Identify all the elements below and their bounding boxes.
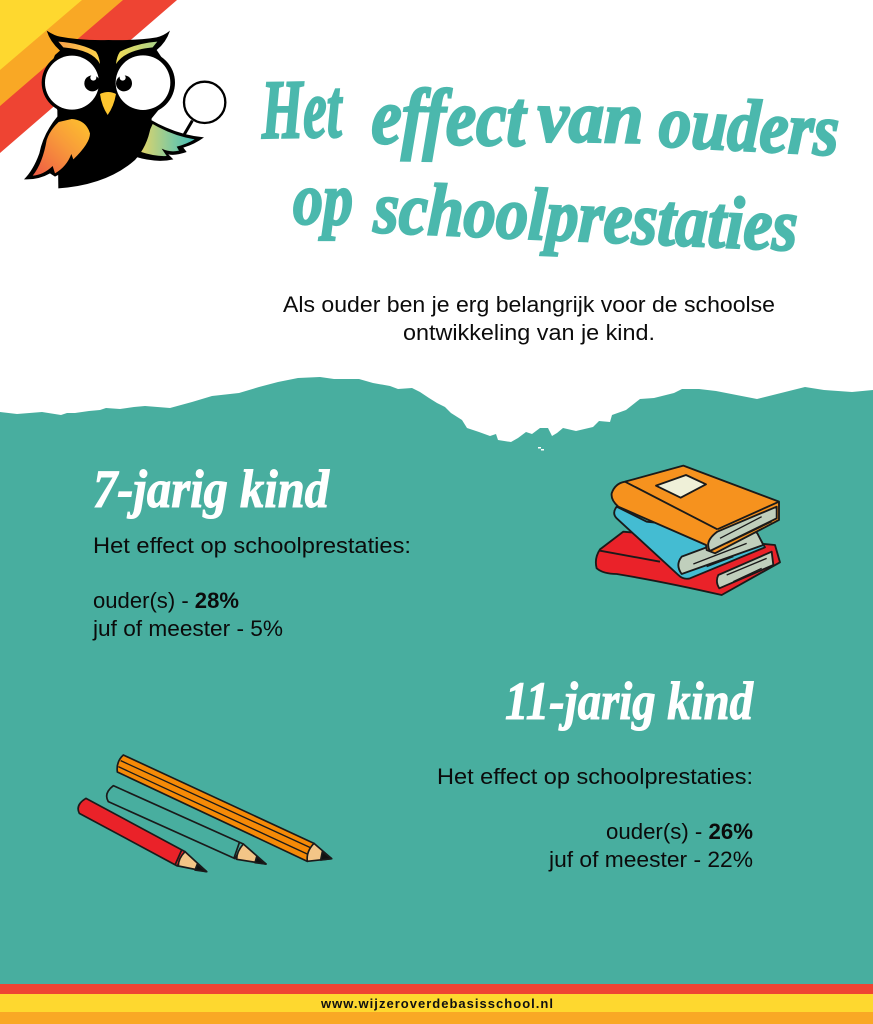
text block: 11-jarig effect — [437, 764, 753, 872]
heading: 11-jarig kind: 11-jarig kind — [505, 671, 754, 731]
intro text: ontwikkeling van je kind. — [403, 320, 655, 345]
book label — [656, 475, 706, 498]
panel: teal background with torn edge — [0, 377, 873, 984]
title: op — [293, 159, 353, 241]
icon: stack of books — [596, 466, 780, 595]
icon: owl mascot with magnifying glass — [24, 31, 225, 188]
blue book — [614, 507, 765, 579]
corner stripes — [0, 0, 177, 153]
owl eyebrows — [58, 42, 157, 64]
teal pencil — [107, 786, 266, 864]
orange pencil — [117, 755, 332, 861]
orange book — [612, 466, 779, 553]
red pencil — [78, 798, 207, 872]
heading: 7-jarig kind: 7-jarig kind — [93, 459, 330, 519]
text block: 11-jarig effect: Het effect op schoolprestaties: — [437, 764, 753, 789]
owl eyes — [42, 52, 175, 114]
owl left wing — [24, 117, 93, 179]
title: schoolprestaties — [371, 167, 799, 267]
text block: 7-jarig effect: Het effect op schoolprestaties: — [93, 533, 411, 558]
footer url: www.wijzeroverdebasisschool.nl — [320, 996, 553, 1011]
title: van — [537, 76, 644, 160]
title: ouders — [657, 81, 841, 172]
torn paper specks — [538, 447, 544, 450]
text block: 11-jarig effect: juf of meester - 22% — [548, 847, 753, 872]
intro text — [283, 292, 775, 345]
footer bands — [0, 984, 873, 1024]
title: Het — [260, 63, 344, 157]
text block: 7-jarig effect: ouder(s) - 28% — [93, 588, 239, 613]
title: effect — [371, 73, 529, 164]
owl body and head — [43, 31, 170, 188]
owl right wing — [135, 119, 204, 161]
icon: magnifying glass — [177, 82, 225, 147]
owl beak — [100, 92, 116, 115]
text block: 7-jarig effect — [92, 533, 411, 641]
title — [260, 63, 841, 267]
icon: pencils — [78, 755, 332, 872]
text block: 11-jarig effect: ouder(s) - 26% — [606, 819, 753, 844]
intro text: Als ouder ben je erg belangrijk voor de schoolse — [283, 292, 775, 317]
text block: 7-jarig effect: juf of meester - 5% — [92, 616, 283, 641]
red book — [596, 532, 780, 595]
